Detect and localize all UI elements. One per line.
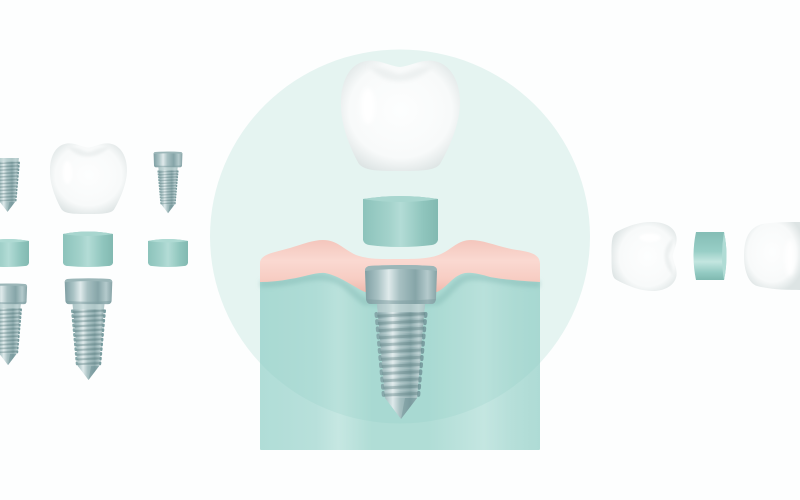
main implant screw (365, 265, 437, 419)
gum (260, 240, 540, 292)
panel: jaw cross-section (258, 240, 542, 450)
cropped lower-left implant (0, 283, 27, 365)
left column abutment (63, 232, 113, 267)
main crown tooth (341, 61, 460, 171)
cropped top-left screw (0, 158, 19, 212)
jawbone block (260, 270, 540, 450)
sideways tooth right (744, 222, 800, 290)
left column tooth (50, 143, 127, 214)
right small abutment (148, 239, 188, 267)
sideways abutment (694, 232, 726, 280)
main abutment cylinder (363, 196, 438, 247)
circle overlap on block (288, 273, 520, 420)
top right small implant (154, 152, 182, 213)
sideways tooth left (612, 222, 677, 291)
cropped left abutment (0, 239, 29, 267)
mint circle backdrop (210, 50, 590, 424)
gum shadow (260, 277, 540, 302)
left column implant (65, 278, 112, 380)
